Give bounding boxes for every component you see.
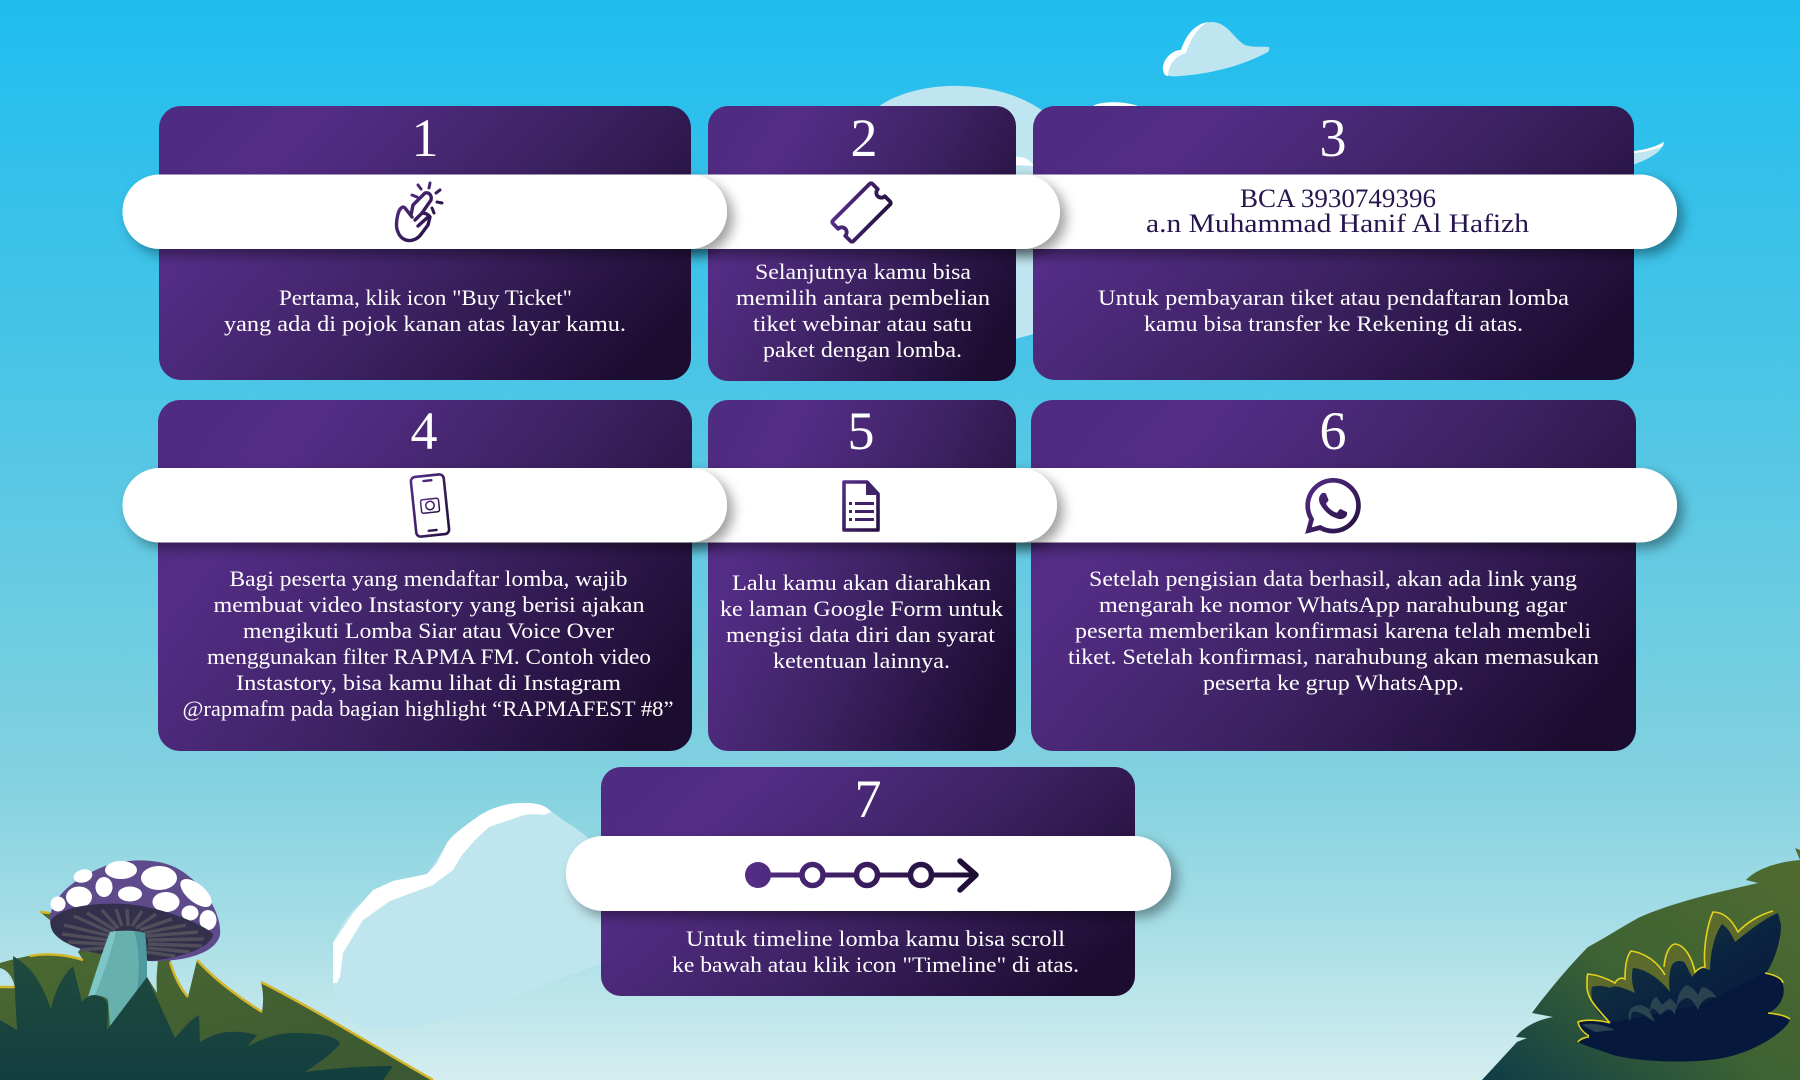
icon: tapping hand (396, 183, 442, 241)
card background (708, 106, 1016, 381)
mushroom cap (50, 860, 220, 961)
bush navy mound (1578, 973, 1790, 1062)
icon: ticket (831, 182, 892, 243)
description: Setelah pengisian data berhasil, akan ada link yang (1089, 566, 1577, 591)
description (672, 926, 1079, 977)
description (182, 566, 674, 721)
mushroom gills (62, 909, 204, 956)
yellow grass edge (0, 912, 433, 1080)
number 4: 4 (410, 401, 438, 461)
description: membuat video Instastory yang berisi ajakan (214, 592, 644, 617)
card background (1031, 400, 1636, 751)
mushroom underside (51, 904, 213, 961)
description: @rapmafm pada bagian highlight “RAPMAFEST #8” (182, 696, 674, 721)
description: Untuk timeline lomba kamu bisa scroll (686, 926, 1065, 951)
description (1098, 285, 1569, 336)
right hill (1482, 848, 1800, 1080)
white band (122, 174, 727, 249)
description: ke bawah atau klik icon "Timeline" di atas. (672, 952, 1079, 977)
description: mengisi data diri dan syarat (726, 622, 995, 647)
white band (620, 174, 1060, 249)
description: peserta ke grup WhatsApp. (1203, 670, 1464, 695)
white band (122, 468, 727, 542)
description: menggunakan filter RAPMA FM. Contoh video (207, 644, 651, 669)
description: Untuk pembayaran tiket atau pendaftaran lomba (1098, 285, 1569, 310)
description (736, 259, 990, 362)
icon: form document (844, 481, 879, 530)
hill bottom left (0, 912, 433, 1080)
bush yellow edges (1578, 911, 1790, 1042)
account text: a.n Muhammad Hanif Al Hafizh (1146, 209, 1529, 238)
bush front leaves (1591, 913, 1781, 1030)
mushroom (50, 860, 220, 1027)
small cloud top right (1163, 22, 1269, 76)
large cloud behind cards (860, 86, 1664, 380)
description: tiket webinar atau satu (753, 311, 972, 336)
description: kamu bisa transfer ke Rekening di atas. (1144, 311, 1523, 336)
description: ke laman Google Form untuk (720, 596, 1003, 621)
white band (960, 468, 1677, 542)
card 3 (960, 106, 1677, 380)
card background (1033, 106, 1634, 380)
icon: whatsapp (1305, 478, 1361, 534)
card background (158, 400, 692, 751)
description: tiket. Setelah konfirmasi, narahubung akan memasukan (1068, 644, 1599, 669)
bush inner highlights (1582, 985, 1717, 1032)
hill and bush bottom right (1482, 848, 1800, 1080)
large cloud bottom left (333, 803, 610, 1030)
icon: phone with camera (410, 474, 450, 537)
card 4 (122, 400, 727, 751)
card background (601, 767, 1135, 996)
card 5 (620, 400, 1057, 751)
account text: BCA 3930749396 (1240, 184, 1436, 213)
description (224, 285, 626, 336)
description: mengikuti Lomba Siar atau Voice Over (243, 618, 615, 643)
mushroom stem (88, 931, 147, 1027)
description: Pertama, klik icon "Buy Ticket" (279, 285, 572, 310)
description: Lalu kamu akan diarahkan (732, 570, 991, 595)
number 2: 2 (850, 108, 878, 168)
account text (1146, 184, 1529, 238)
white band (566, 836, 1171, 911)
card 1 (122, 106, 727, 380)
mushroom spots (50, 861, 216, 930)
olive spike behind cap (40, 912, 56, 925)
bush olive back leaves (1587, 911, 1780, 1030)
icon: timeline arrow (745, 861, 976, 890)
description (1068, 566, 1599, 695)
description: Selanjutnya kamu bisa (755, 259, 971, 284)
number 1: 1 (412, 108, 438, 168)
description: peserta memberikan konfirmasi karena telah membeli (1075, 618, 1591, 643)
description: yang ada di pojok kanan atas layar kamu. (224, 311, 626, 336)
card background (159, 106, 691, 380)
dark grass bottom left (0, 956, 393, 1080)
description (720, 570, 1003, 673)
card 6 (960, 400, 1677, 751)
card background (708, 400, 1016, 751)
description: memilih antara pembelian (736, 285, 990, 310)
description: Bagi peserta yang mendaftar lomba, wajib (230, 566, 628, 591)
white band with account (960, 174, 1677, 249)
description: ketentuan lainnya. (773, 648, 950, 673)
white band (620, 468, 1057, 542)
number 3: 3 (1320, 108, 1346, 168)
card 7 (566, 767, 1171, 996)
description: Instastory, bisa kamu lihat di Instagram (236, 670, 621, 695)
description: paket dengan lomba. (763, 337, 962, 362)
card 2 (620, 106, 1060, 381)
description: mengarah ke nomor WhatsApp narahubung agar (1099, 592, 1568, 617)
number 6: 6 (1320, 401, 1346, 461)
number 7: 7 (854, 769, 882, 829)
light grass hill (0, 935, 433, 1080)
number 5: 5 (848, 401, 874, 461)
